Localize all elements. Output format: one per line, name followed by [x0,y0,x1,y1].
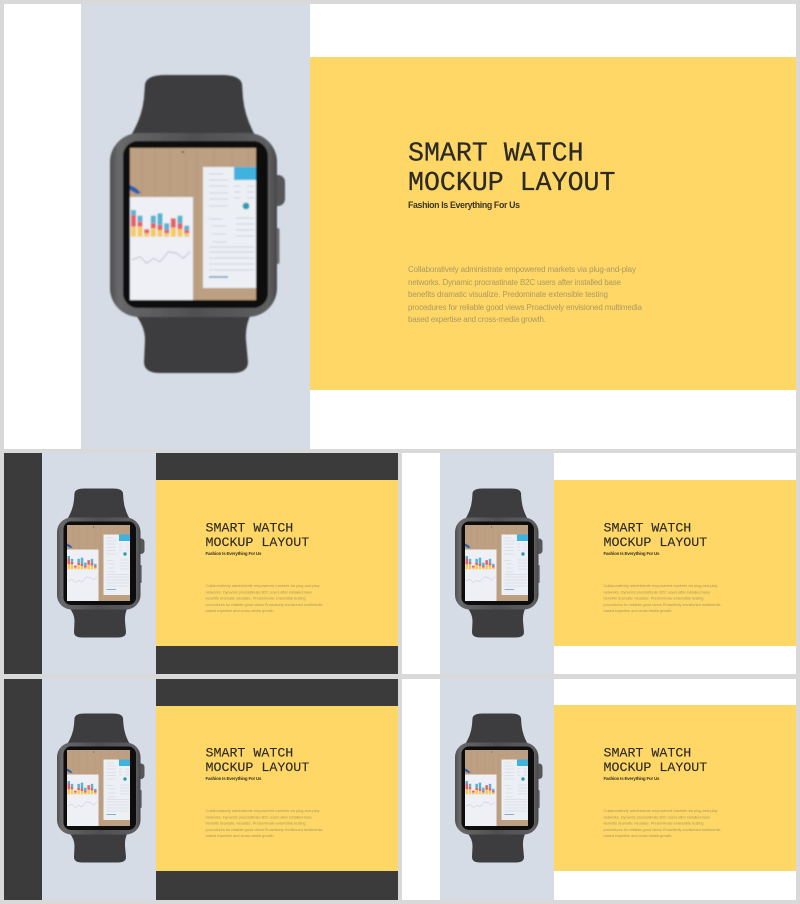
title: MOCKUP LAYOUT [206,760,309,775]
title: based expertise and cross-media growth. [206,833,274,838]
title: Fashion Is Everything For Us [206,776,262,781]
title: based expertise and cross-media growth. [206,608,274,613]
title: Fashion Is Everything For Us [206,551,262,556]
title: Fashion Is Everything For Us [604,776,660,781]
title: SMART WATCH [604,520,691,535]
title: Collaboratively administrate empowered markets via plug-and-play [206,808,320,813]
title: MOCKUP LAYOUT [408,168,615,198]
title: Collaboratively administrate empowered markets via plug-and-play [206,583,320,588]
title: benefits dramatic visualize. Predominate extensible testing [604,596,704,600]
icon: smart watch mockup [57,488,144,638]
body text: Collaboratively administrate empowered markets via plug-and-play [408,265,636,274]
title: procedures for reliable good views Proactively envisioned multimedia [604,602,721,607]
title: SMART WATCH [206,520,293,535]
title: based expertise and cross-media growth. [604,608,672,613]
title: MOCKUP LAYOUT [604,535,707,550]
title: networks. Dynamic procrastinate B2C users after installed base [604,590,711,594]
title [604,520,721,613]
body text: based expertise and cross-media growth. [408,315,546,324]
body text: networks. Dynamic procrastinate B2C users after installed base [408,278,622,287]
title: SMART WATCH [206,745,293,760]
body text: benefits dramatic visualize. Predominate extensible testing [408,290,608,299]
subtitle: Fashion Is Everything For Us [408,200,520,210]
title: networks. Dynamic procrastinate B2C users after installed base [206,814,313,820]
icon: smart watch mockup [57,714,144,862]
title [206,745,323,838]
title: SMART WATCH [604,745,691,760]
panel: dark slide bottom [4,679,398,900]
title: based expertise and cross-media growth. [604,833,672,838]
panel: light slide top [402,453,796,674]
title: benefits dramatic visualize. Predominate extensible testing [604,820,704,826]
panel: main slide [4,4,796,449]
icon: smart watch mockup [110,75,285,373]
title [206,520,323,613]
title: procedures for reliable good views Proactively envisioned multimedia [604,827,721,832]
title: procedures for reliable good views Proactively envisioned multimedia [206,827,323,832]
title: MOCKUP LAYOUT [206,535,309,550]
title [604,745,721,838]
panel: light slide bottom [402,679,796,900]
body text: procedures for reliable good views Proactively envisioned multimedia [408,303,643,312]
title: benefits dramatic visualize. Predominate extensible testing [206,596,306,600]
title: SMART WATCH [408,138,584,168]
icon: smart watch mockup [455,714,542,862]
title: Collaboratively administrate empowered markets via plug-and-play [604,583,718,588]
title: networks. Dynamic procrastinate B2C users after installed base [206,590,313,594]
icon: smart watch mockup [455,488,542,638]
title: Collaboratively administrate empowered markets via plug-and-play [604,808,718,813]
title: MOCKUP LAYOUT [604,760,707,775]
title: Fashion Is Everything For Us [604,551,660,556]
panel: dark slide top [4,453,398,674]
title: benefits dramatic visualize. Predominate extensible testing [206,820,306,826]
title: networks. Dynamic procrastinate B2C users after installed base [604,814,711,820]
title: procedures for reliable good views Proactively envisioned multimedia [206,602,323,607]
